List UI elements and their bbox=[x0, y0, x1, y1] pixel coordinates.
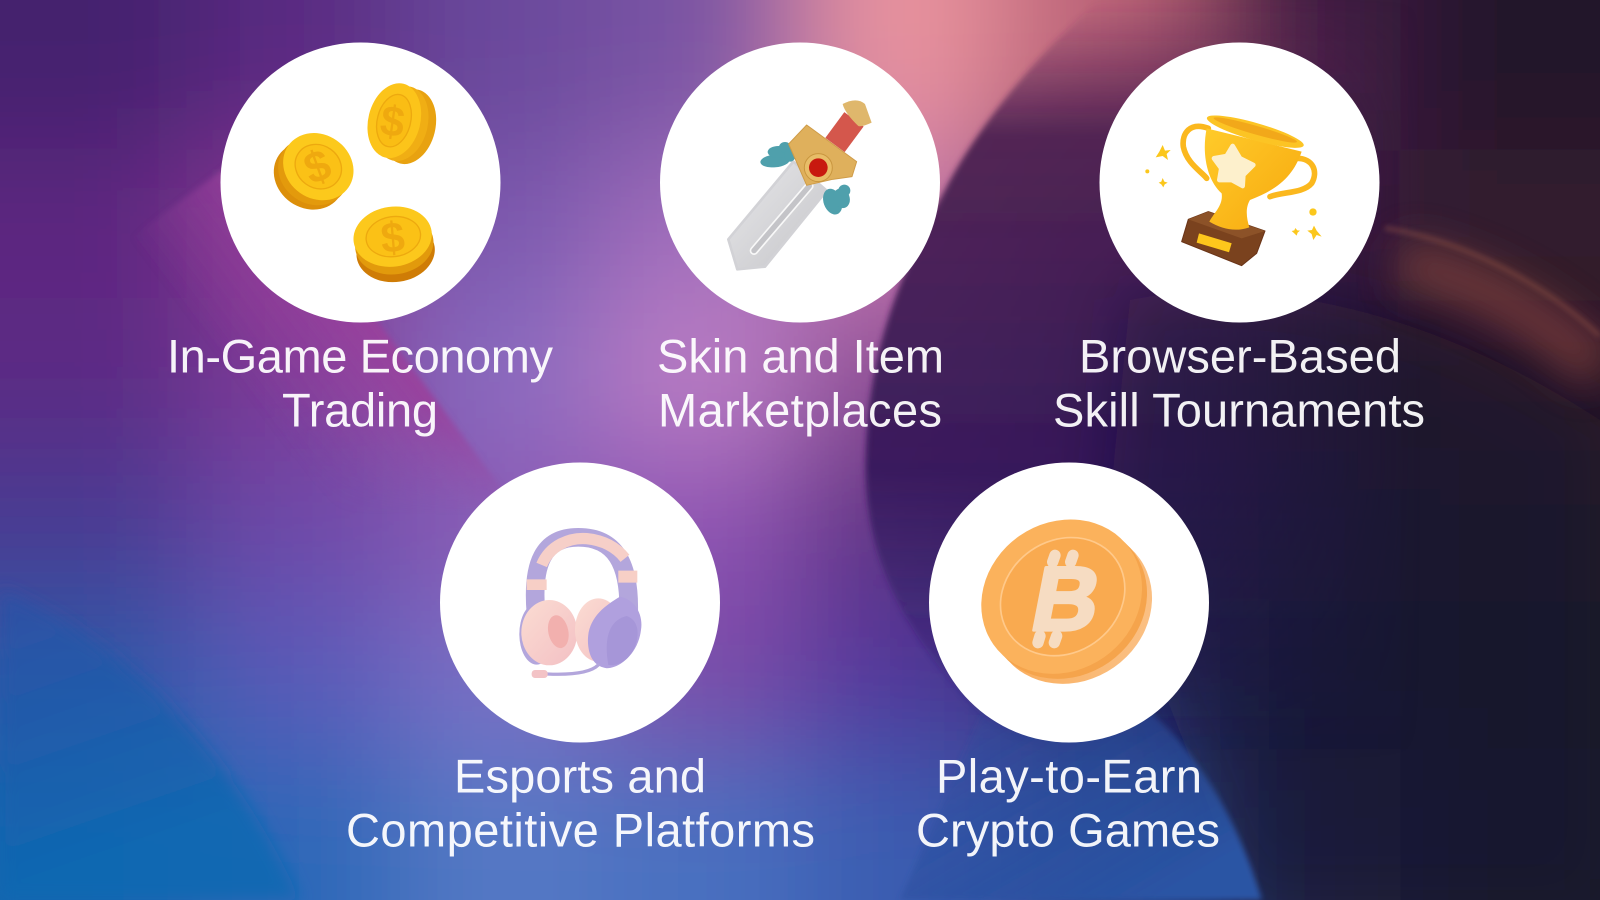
circle: headset bbox=[440, 462, 720, 742]
label bbox=[916, 750, 1220, 856]
label: Esports and bbox=[454, 750, 706, 802]
icon: gold coins: $ bbox=[298, 140, 337, 194]
circle: trophy bbox=[1100, 42, 1380, 322]
label bbox=[1053, 330, 1425, 436]
circle: sword bbox=[660, 42, 940, 322]
icon: bitcoin coin: B bbox=[1024, 549, 1109, 650]
label: Trading bbox=[282, 384, 438, 436]
panel: Play-to-Earn Crypto Games bbox=[916, 462, 1220, 856]
icon: gold coins: $ bbox=[379, 213, 407, 263]
label: Play-to-Earn bbox=[936, 750, 1202, 802]
icon: trophy bbox=[1145, 109, 1322, 266]
label: Skill Tournaments bbox=[1053, 384, 1425, 436]
label: Browser-Based bbox=[1079, 330, 1401, 382]
label bbox=[657, 330, 944, 436]
icon: gold coins bbox=[261, 78, 444, 287]
icon: sword bbox=[728, 100, 872, 269]
label: Competitive Platforms bbox=[346, 804, 815, 856]
label: Crypto Games bbox=[916, 804, 1220, 856]
icon: gold coins: $ bbox=[377, 97, 408, 147]
panel: Browser-Based Skill Tournaments bbox=[1053, 42, 1425, 436]
label: Marketplaces bbox=[658, 384, 942, 436]
label bbox=[346, 750, 815, 856]
panel: Esports and Competitive Platforms bbox=[346, 462, 815, 856]
icon: headset bbox=[519, 537, 641, 678]
icon: bitcoin coin bbox=[951, 488, 1182, 715]
panel: In-Game Economy Trading bbox=[167, 42, 554, 436]
circle: bitcoin bbox=[929, 462, 1209, 742]
label: Skin and Item bbox=[657, 330, 944, 382]
label bbox=[167, 330, 554, 436]
circle: coins bbox=[220, 42, 500, 322]
panel: Skin and Item Marketplaces bbox=[657, 42, 944, 436]
label: In-Game Economy bbox=[167, 330, 554, 382]
